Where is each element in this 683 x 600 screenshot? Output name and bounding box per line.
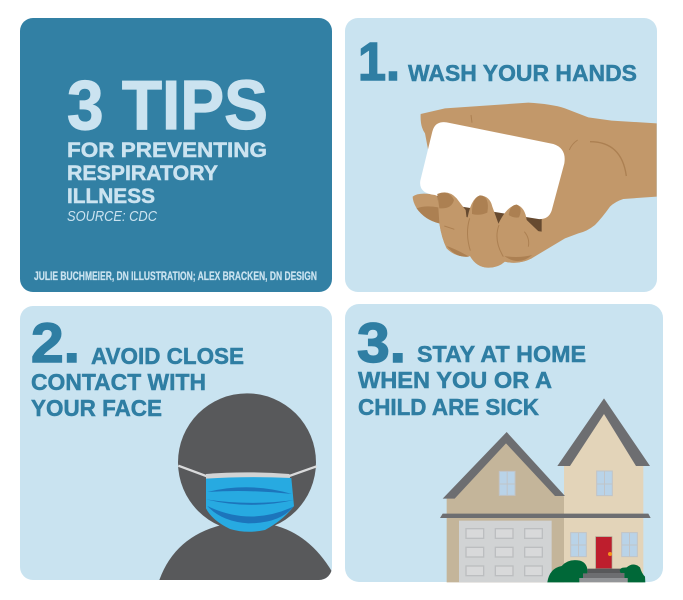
- subheading: ILLNESS: [67, 184, 155, 208]
- fingers: [437, 192, 471, 256]
- icon: person wearing mask: [159, 393, 337, 580]
- heading: avoid close contact: CONTACT WITH: [31, 369, 206, 395]
- heading: avoid close contact: AVOID CLOSE: [91, 343, 244, 369]
- panel: stay at home: [345, 304, 663, 582]
- heading: 3 tips: 3 TIPS: [67, 66, 268, 144]
- heading: wash your hands: WASH YOUR HANDS: [408, 60, 637, 86]
- credits: JULIE BUCHMEIER, DN ILLUSTRATION; ALEX BRACKEN, DN DESIGN: [34, 271, 317, 283]
- icon: house: [440, 398, 651, 582]
- number 2: 2.: [31, 311, 80, 374]
- heading: stay at home: STAY AT HOME: [417, 341, 586, 367]
- number 1: 1.: [358, 32, 400, 92]
- heading: avoid close contact: [31, 343, 244, 421]
- heading: stay at home: CHILD ARE SICK: [358, 394, 539, 420]
- heading: stay at home: WHEN YOU OR A: [358, 367, 552, 393]
- subheading: FOR PREVENTING: [67, 138, 267, 162]
- panel: avoid close contact: [20, 306, 337, 580]
- source: SOURCE: CDC: [67, 209, 157, 225]
- heading: stay at home: [358, 341, 586, 420]
- number 3: 3.: [357, 311, 406, 374]
- panel: title: [20, 18, 332, 292]
- icon: hand holding soap: [413, 103, 657, 268]
- panel: wash your hands: [345, 18, 657, 292]
- subheading: RESPIRATORY: [67, 161, 218, 185]
- subheading: [67, 138, 267, 208]
- heading: avoid close contact: YOUR FACE: [31, 395, 162, 421]
- soap: [420, 122, 565, 219]
